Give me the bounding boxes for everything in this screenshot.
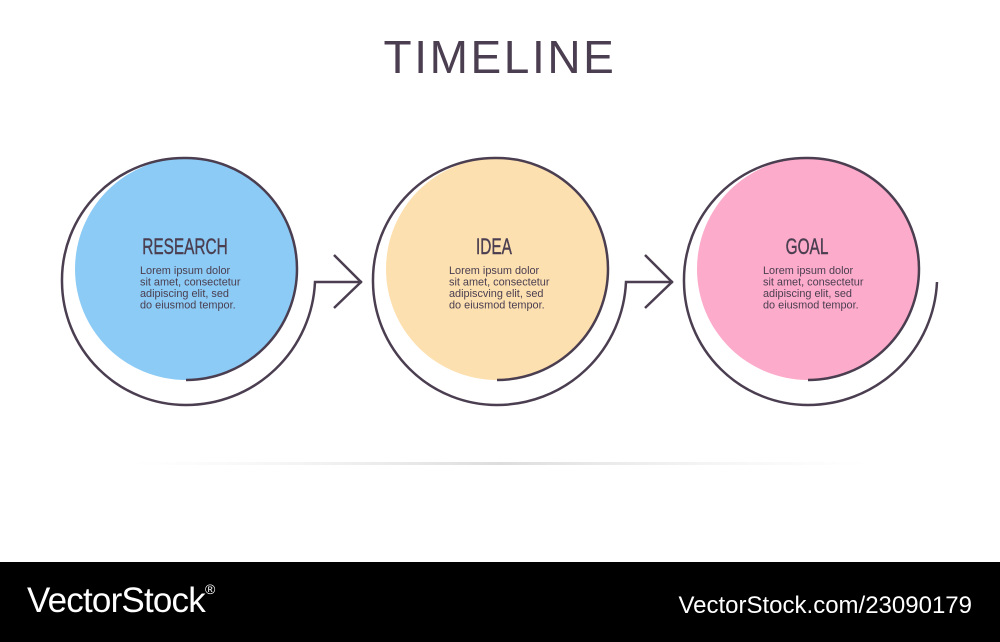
- step 1: research: Lorem ipsum dolor: [140, 265, 231, 277]
- step 1: research: sit amet, consectetur: [140, 276, 241, 288]
- step 2: idea: Lorem ipsum dolor: [449, 265, 540, 277]
- step 2: idea: adipiscving elit, sed: [449, 288, 543, 300]
- step 2: idea: sit amet, consectetur: [449, 276, 550, 288]
- step 2: idea: [373, 158, 673, 405]
- arrow 2: [645, 255, 672, 308]
- step 3: goal: adipiscing elit, sed: [763, 288, 852, 300]
- step 3: goal: GOAL: [786, 235, 828, 260]
- step 2: idea: do eiusmod tempor.: [449, 300, 545, 312]
- step 1: research: [62, 158, 362, 405]
- footer id text: VectorStock.com/23090179: [678, 592, 972, 619]
- step 3: goal: [684, 158, 937, 405]
- arrow 1: [334, 255, 361, 308]
- step 3: goal: Lorem ipsum dolor: [763, 265, 854, 277]
- step 2: idea: IDEA: [476, 235, 512, 260]
- title: TIMELINE: [384, 31, 616, 83]
- footer bar: [0, 562, 1000, 642]
- footer logo text: VectorStock®: [27, 581, 214, 620]
- step 1: research: RESEARCH: [142, 235, 228, 260]
- step 1: research: do eiusmod tempor.: [140, 300, 236, 312]
- step 3: goal: do eiusmod tempor.: [763, 300, 859, 312]
- step 3: goal: sit amet, consectetur: [763, 276, 864, 288]
- step 1: research: adipiscing elit, sed: [140, 288, 229, 300]
- floor shadow: [130, 462, 870, 465]
